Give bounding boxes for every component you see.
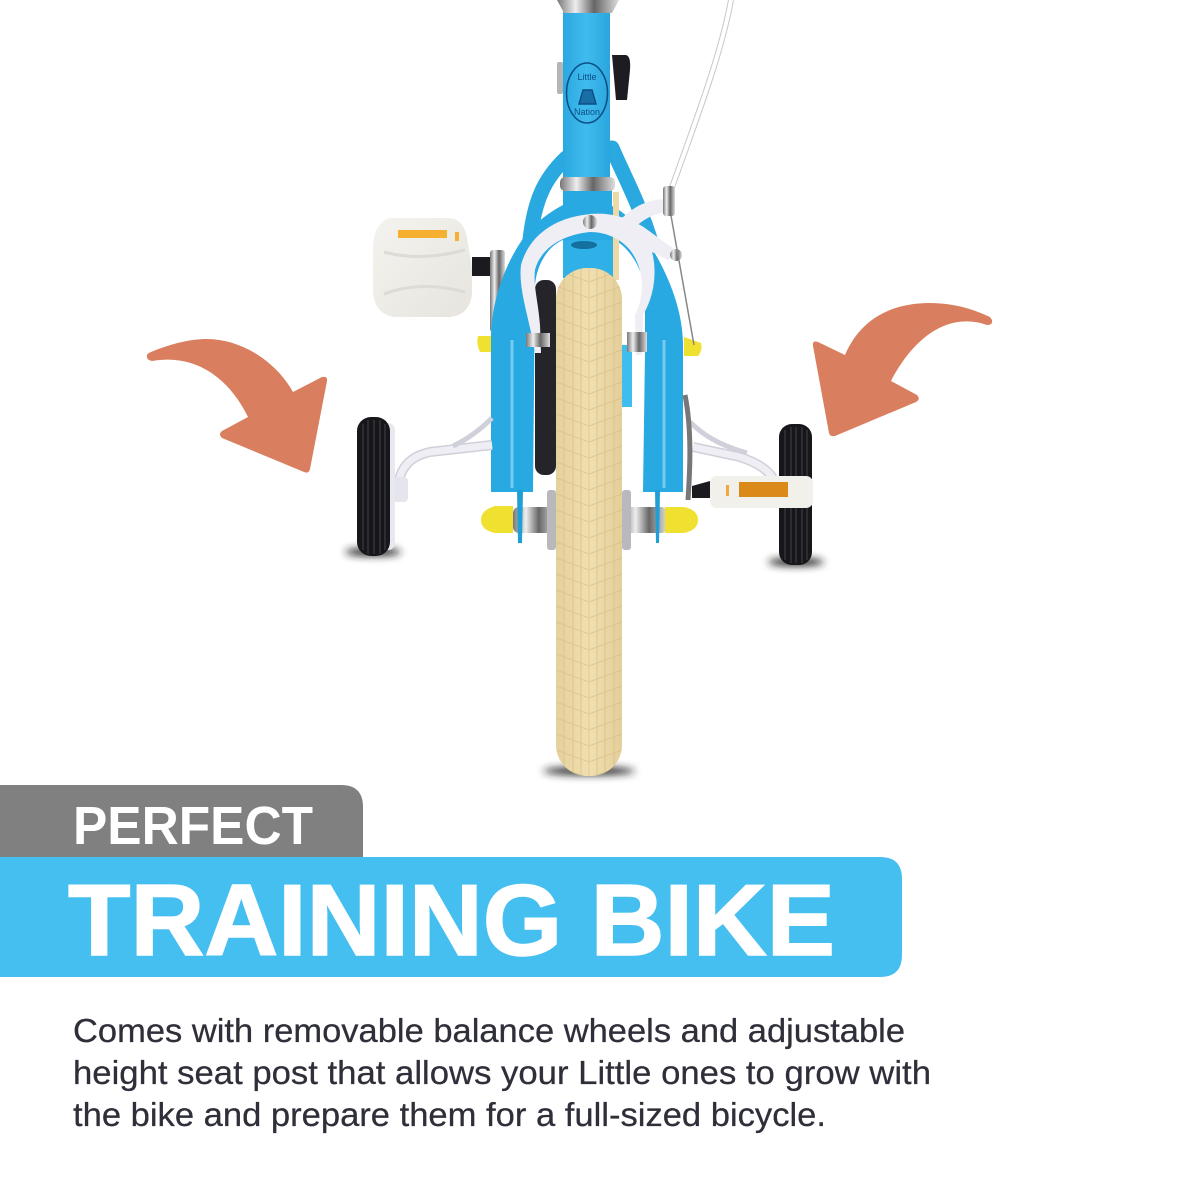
left pedal [373,218,505,332]
crown hole [571,241,597,249]
right training wheel [690,422,812,565]
description text: Comes with removable balance wheels and adjustable [73,1012,905,1049]
yellow rear nuts [477,336,492,352]
description text: height seat post that allows your Little ones to grow with [73,1054,931,1091]
logo badge [566,63,608,123]
fork and crown [491,188,683,492]
logo badge: Nation [574,107,600,117]
heading tab: perfect [0,785,363,860]
right crank [685,395,690,500]
logo badge: Little [577,72,597,82]
fork highlights [512,340,664,488]
top chrome headset [557,0,619,13]
brake lever reflector [612,55,630,100]
rear side bracket [557,62,563,94]
tyre [556,268,622,776]
rear tyre strip [613,192,619,280]
right pedal [692,476,813,508]
brake cable [663,0,731,345]
description text [73,1012,931,1133]
heading tab: perfect: PERFECT [73,796,313,856]
arrow: pointing to left training wheel [147,339,327,473]
front axle hub [481,490,698,550]
brake caliper [521,199,678,355]
illustration: bike front view [357,0,813,776]
heading banner: training bike: TRAINING BIKE [68,865,835,977]
steerer behind tyre [563,238,613,278]
frame rear tubes [529,148,652,250]
description text: the bike and prepare them for a full-sized bicycle. [73,1096,826,1133]
arrow: pointing to right training wheel [813,303,992,436]
chrome ring [560,177,615,191]
head tube [563,12,610,182]
left training wheel [357,417,492,556]
ground shadows [345,548,824,775]
rear wheel behind [535,280,556,475]
brake bolts and shoes [526,215,682,352]
